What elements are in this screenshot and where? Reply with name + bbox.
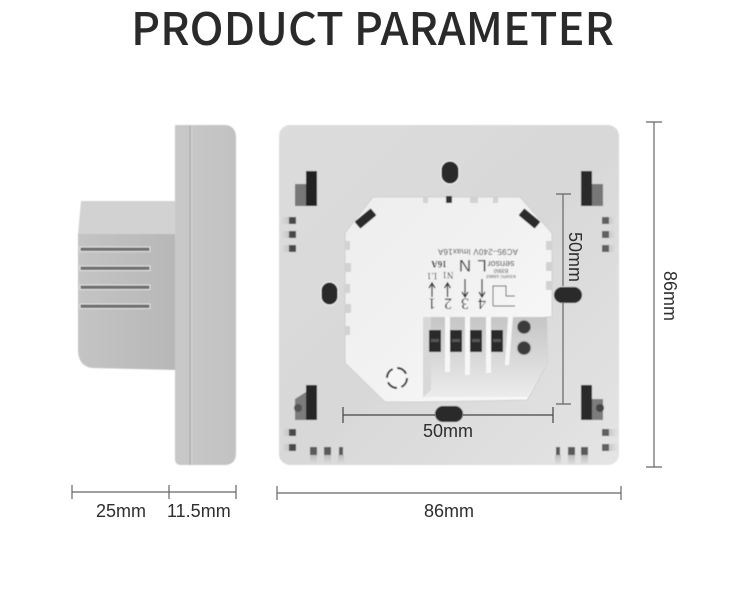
upside-down terminal numbers: 4: [478, 294, 486, 312]
front plate: [175, 125, 236, 465]
upside-down current label: 16A: [431, 259, 447, 269]
module body: [345, 197, 552, 402]
bottom vent squares: [310, 447, 588, 464]
dimension: inner width 50mm: 50mm: [423, 421, 473, 441]
upside-down terminal numbers: 1: [428, 294, 436, 312]
dimension: inner height 50mm: [556, 194, 585, 404]
dimension: inner width 50mm: [343, 407, 553, 441]
dimension: overall width 86mm: 86mm: [424, 501, 474, 521]
module notches: [345, 197, 552, 335]
upside-down L terminal letter: L: [477, 256, 487, 275]
top centre marker: [446, 196, 452, 203]
mounting cutout top left: [295, 171, 317, 206]
dimension: depth 25mm and 11.5mm: [72, 485, 236, 521]
side view of thermostat: [78, 125, 236, 465]
terminal sockets: [429, 330, 503, 352]
diagonal slot left: [355, 208, 376, 229]
left oval hole: [321, 282, 338, 305]
rear body: [78, 201, 176, 370]
sensor wiring diagram: [493, 286, 515, 306]
vent slots: [80, 247, 150, 308]
dimension: overall width 86mm: [277, 486, 621, 521]
upside-down N terminal letter: N: [459, 256, 471, 275]
terminal block: [423, 317, 548, 397]
left vent squares: [280, 217, 296, 451]
wiring module: [345, 196, 552, 402]
depth 11.5mm label: 11.5mm: [167, 501, 231, 521]
dimension: overall height 86mm: [646, 122, 680, 467]
sensor screws: [517, 320, 531, 355]
upside-down sensor label: sensor: [487, 259, 515, 269]
diagonal slot right: [519, 208, 540, 229]
mounting cutout top right: [581, 171, 603, 206]
terminal dividers: [445, 317, 513, 375]
back plate: [279, 125, 619, 465]
upside-down B3950 label: B3950: [494, 267, 508, 273]
upside-down N1 label: N1: [442, 270, 454, 280]
upside-down model label: KSXPC-16963: [486, 274, 516, 279]
mounting cutout bottom left: [294, 385, 317, 420]
dimension: overall height 86mm: 86mm: [660, 271, 680, 321]
mounting cutout bottom right: [581, 385, 604, 420]
upside-down terminal numbers: 2: [444, 294, 452, 312]
depth 25mm label: 25mm: [96, 501, 146, 521]
round knockout: [387, 368, 407, 388]
upside-down rating label: AC95–240V Imax16A: [437, 247, 518, 256]
upside-down L1 label: L1: [427, 271, 437, 281]
back view of thermostat: [279, 125, 619, 465]
upside-down terminal numbers: [428, 294, 486, 312]
upside-down terminal numbers: 3: [461, 294, 469, 312]
bottom oval hole: [435, 406, 463, 422]
right oval hole: [554, 287, 582, 303]
terminal arrows: [429, 279, 485, 297]
top oval hole: [441, 161, 459, 184]
dimension: inner height 50mm: 50mm: [565, 232, 585, 282]
right vent squares: [602, 217, 618, 451]
